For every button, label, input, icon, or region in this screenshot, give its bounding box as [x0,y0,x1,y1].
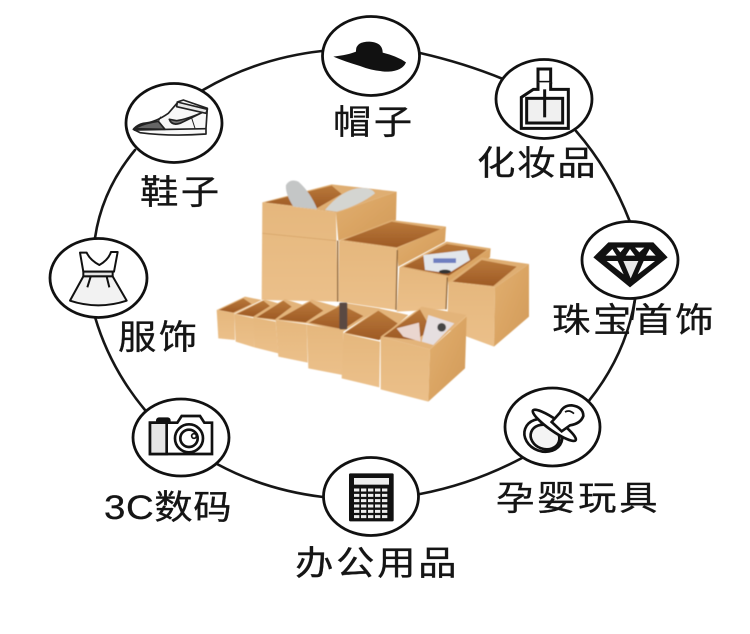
category: jewellery [552,222,714,339]
small box 7 with cards [381,307,467,402]
icon: sneaker [133,100,207,135]
second box [338,220,446,310]
category: clothing [50,238,197,356]
icon: calculator [349,473,394,521]
icon: pacifier [520,405,583,457]
icon: perfume bottle [521,69,568,128]
small box 4 [276,299,337,363]
label: 3C digital: 3C数码 [104,488,232,526]
connector over jewellery label [632,299,635,320]
label: hat: 帽子 [333,103,412,141]
icon: dress [70,252,127,305]
icon: camera [150,416,212,454]
back row of boxes [262,181,529,347]
label: office supplies: 办公用品 [295,544,457,582]
ring connecting the categories [95,51,635,497]
label: jewellery: 珠宝首饰 [552,301,714,339]
small box 1 [217,297,262,340]
category: office supplies [295,458,457,582]
large box with shoes [262,181,397,302]
small box 2 [234,299,278,347]
small box 5 with lipstick [307,303,380,375]
seams between back boxes [338,241,447,310]
label: baby toys: 孕婴玩具 [496,479,658,517]
category: shoes [126,84,222,211]
front row of small boxes [217,297,467,402]
category: hat [322,16,420,141]
small box 6 [342,308,408,387]
icon: hat [333,42,406,72]
category: baby toys [496,388,658,517]
label: shoes: 鞋子 [140,173,219,211]
fourth box [447,257,529,347]
icon: diamond [593,242,668,287]
label: cosmetics: 化妆品 [477,144,596,182]
cardboard boxes photo [217,181,529,402]
category: cosmetics [477,60,596,182]
category: 3C digital [104,399,232,526]
small box 3 [253,299,303,353]
third box with blue item [397,242,491,312]
label: clothing: 服饰 [118,318,197,356]
